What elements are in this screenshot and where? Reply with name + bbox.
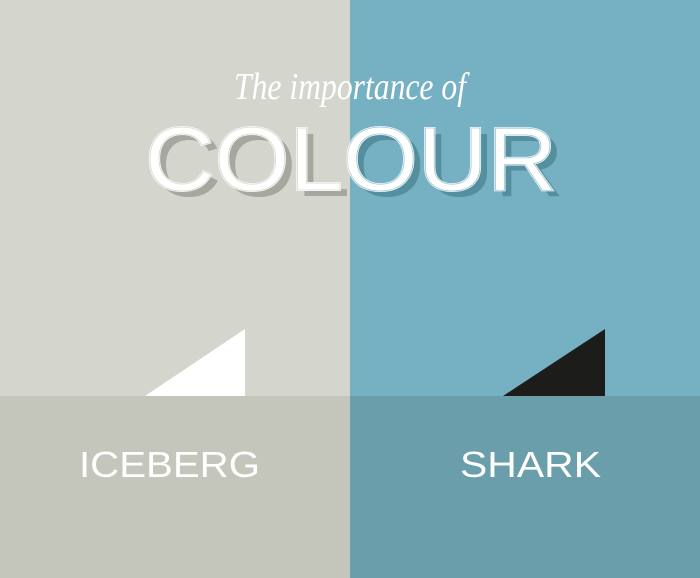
label: iceberg: ICEBERG bbox=[79, 444, 260, 485]
title: COLOUR: COLOUR bbox=[152, 116, 564, 216]
label: shark: SHARK bbox=[460, 444, 601, 485]
title: COLOUR: COLOUR bbox=[152, 116, 564, 216]
panel: shark water band bbox=[350, 396, 700, 578]
icon: shark fin triangle bbox=[503, 329, 605, 396]
title: COLOUR: COLOUR bbox=[145, 110, 557, 210]
title: COLOUR: COLOUR bbox=[145, 110, 557, 210]
panel: iceberg background bbox=[0, 0, 350, 396]
panel: iceberg water band bbox=[0, 396, 350, 578]
icon: iceberg tip triangle bbox=[145, 329, 245, 396]
title: COLOUR bbox=[148, 126, 560, 197]
subtitle: The importance of bbox=[234, 66, 470, 108]
panel: shark background bbox=[350, 0, 700, 396]
title: COLOUR: COLOUR bbox=[145, 110, 557, 210]
